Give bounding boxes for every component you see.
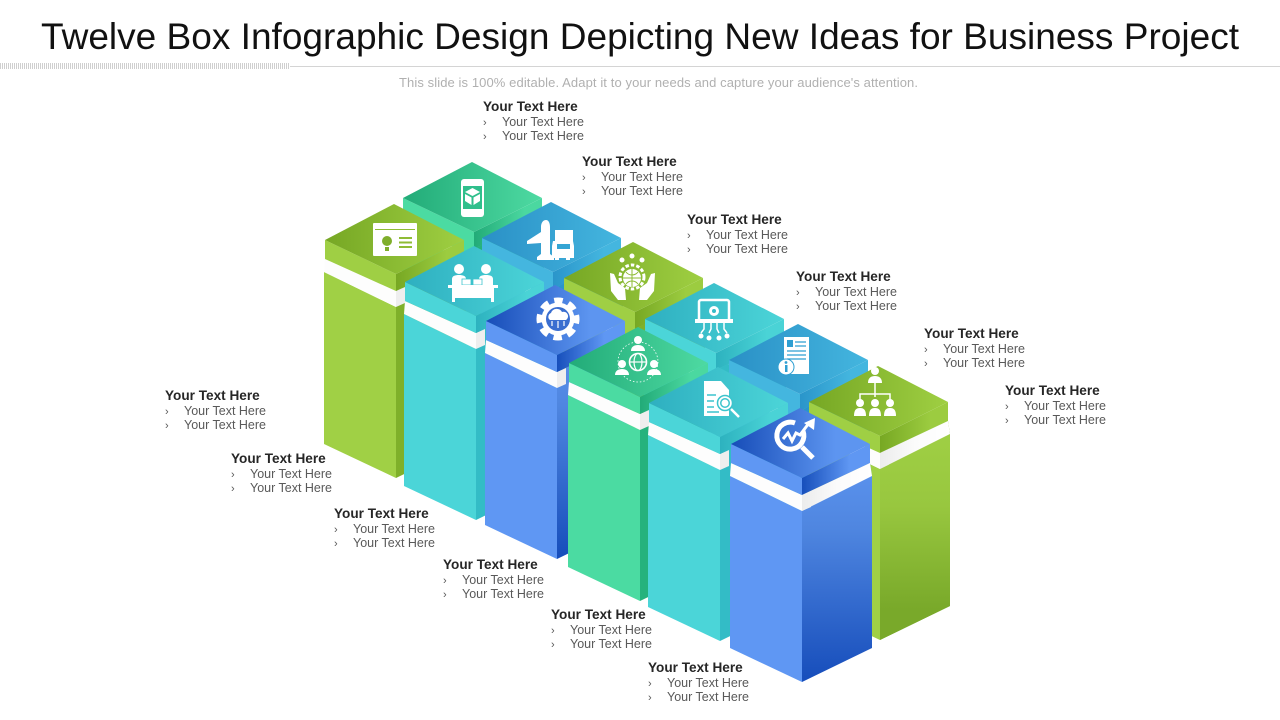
label: bottom 1: Your Text Here <box>165 388 260 403</box>
icon: two people at a desk <box>448 264 498 302</box>
label: bottom 4: Your Text Here <box>443 557 538 572</box>
label: bottom 5 <box>551 607 652 651</box>
label: top 1: Your Text Here <box>502 115 584 129</box>
label: top 3: Your Text Here <box>706 228 788 242</box>
label: bottom 4: › <box>443 589 447 601</box>
label: top 5: Your Text Here <box>943 342 1025 356</box>
label: bottom 3: Your Text Here <box>353 522 435 536</box>
label: top 1: Your Text Here <box>502 129 584 143</box>
label: bottom 6: Your Text Here <box>667 676 749 690</box>
label: bottom 1 <box>165 388 266 432</box>
icon: phone with cube <box>461 179 484 217</box>
label: top 5: Your Text Here <box>924 326 1019 341</box>
label: bottom 4: Your Text Here <box>462 573 544 587</box>
label: top 6: Your Text Here <box>1024 413 1106 427</box>
label: top 5: › <box>924 344 928 356</box>
label: top 4: Your Text Here <box>815 299 897 313</box>
icon: laptop with gear and circuit <box>695 300 733 340</box>
box 4: lime hands with globe <box>563 242 705 516</box>
label: top 1: Your Text Here <box>483 99 578 114</box>
label: top 4: Your Text Here <box>815 285 897 299</box>
label: bottom 3: Your Text Here <box>334 506 429 521</box>
label: top 3: › <box>687 244 691 256</box>
box 10: green globe people <box>568 327 710 601</box>
icon: magnifier with growth chart <box>777 418 815 458</box>
label: bottom 6: Your Text Here <box>667 690 749 704</box>
label: bottom 2: › <box>231 469 235 481</box>
label: bottom 1: › <box>165 406 169 418</box>
label: bottom 1: › <box>165 420 169 432</box>
label: top 6: Your Text Here <box>1024 399 1106 413</box>
box 6: sky document info <box>728 324 870 598</box>
icon: browser window with bulb <box>373 223 417 256</box>
label: bottom 4: Your Text Here <box>462 587 544 601</box>
label: bottom 2 <box>231 451 332 495</box>
label: top 1: › <box>483 131 487 143</box>
icon: organisation chart <box>854 367 896 416</box>
label: bottom 2: › <box>231 483 235 495</box>
box 12: blue chart search <box>730 408 872 682</box>
box 11: teal document search <box>648 367 790 641</box>
icon: gear with cloud circuit <box>537 298 579 340</box>
label: top 5: › <box>924 358 928 370</box>
icon: globe and people network <box>615 336 661 382</box>
label: top 3 <box>687 212 788 256</box>
box 2: green phone <box>402 162 544 436</box>
label: top 6: Your Text Here <box>1005 383 1100 398</box>
icon: plane and truck <box>527 220 574 260</box>
icon: hands holding gear and globe <box>610 254 655 300</box>
icon: document with magnifier <box>704 381 739 417</box>
label: top 6: › <box>1005 401 1009 413</box>
label: bottom 6 <box>648 660 749 704</box>
label: bottom 5: › <box>551 639 555 651</box>
label: top 2: › <box>582 172 586 184</box>
label: top 5: Your Text Here <box>943 356 1025 370</box>
label: top 3: Your Text Here <box>706 242 788 256</box>
label: top 1: › <box>483 117 487 129</box>
label: bottom 1: Your Text Here <box>184 418 266 432</box>
label: bottom 6: › <box>648 692 652 704</box>
box 5: teal laptop gear <box>644 283 786 557</box>
label: top 2: Your Text Here <box>601 184 683 198</box>
label: top 4: Your Text Here <box>796 269 891 284</box>
box 1: lime browser idea <box>324 204 466 478</box>
box 8: teal people at desk <box>404 246 546 520</box>
label: bottom 3: Your Text Here <box>353 536 435 550</box>
label: bottom 4 <box>443 557 544 601</box>
label: bottom 3: › <box>334 538 338 550</box>
label: top 2: Your Text Here <box>582 154 677 169</box>
box 7: lime org chart <box>808 366 950 640</box>
label: bottom 6: Your Text Here <box>648 660 743 675</box>
box 3: sky plane and truck <box>481 202 623 476</box>
label: top 3: › <box>687 230 691 242</box>
label: top 1 <box>483 99 584 143</box>
label: top 6 <box>1005 383 1106 427</box>
label: bottom 2: Your Text Here <box>250 467 332 481</box>
subtitle: This slide is 100% editable. Adapt it to your needs and capture your audience's attention. <box>399 75 918 90</box>
label: top 4 <box>796 269 897 313</box>
label: bottom 6: › <box>648 678 652 690</box>
label: top 4: › <box>796 287 800 299</box>
label: top 2: › <box>582 186 586 198</box>
title: Twelve Box Infographic Design Depicting New Ideas for Business Project <box>41 16 1240 57</box>
label: top 3: Your Text Here <box>687 212 782 227</box>
label: top 2: Your Text Here <box>601 170 683 184</box>
label: bottom 5: Your Text Here <box>570 623 652 637</box>
label: top 5 <box>924 326 1025 370</box>
box 9: blue cloud gear <box>485 285 627 559</box>
icon: resume with info badge <box>778 337 809 375</box>
label: bottom 2: Your Text Here <box>250 481 332 495</box>
label: top 2 <box>582 154 683 198</box>
label: bottom 5: › <box>551 625 555 637</box>
label: bottom 4: › <box>443 575 447 587</box>
label: bottom 1: Your Text Here <box>184 404 266 418</box>
label: bottom 2: Your Text Here <box>231 451 326 466</box>
label: bottom 5: Your Text Here <box>570 637 652 651</box>
label: bottom 5: Your Text Here <box>551 607 646 622</box>
label: top 6: › <box>1005 415 1009 427</box>
label: top 4: › <box>796 301 800 313</box>
label: bottom 3: › <box>334 524 338 536</box>
label: bottom 3 <box>334 506 435 550</box>
